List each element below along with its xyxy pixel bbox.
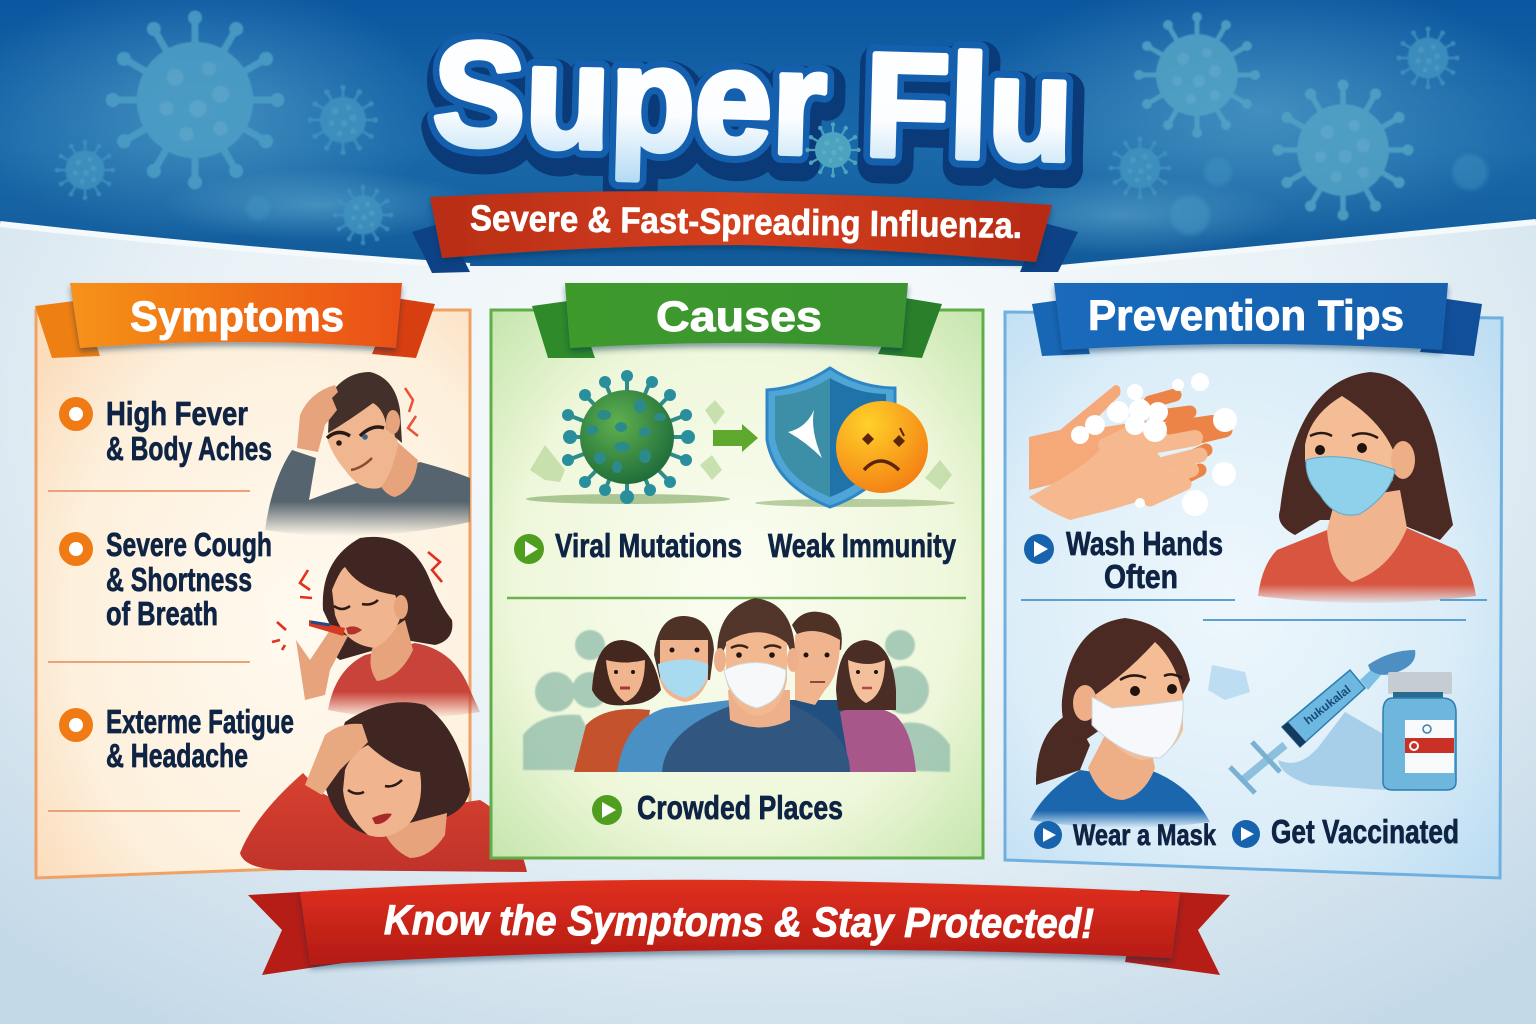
illustration: crowd [523,598,950,772]
cause label: crowded places [592,789,843,826]
subtitle ribbon: Severe & Fast-Spreading Influenza. [470,197,1022,246]
label: of Breath [106,595,218,632]
prevention banner [1032,283,1482,356]
panel: causes [491,283,983,858]
person: woman in orange [574,640,661,772]
causes banner [532,283,942,358]
label: High Fever [106,395,248,432]
panel: prevention tips [1005,283,1502,878]
illustration: woman coughing [272,537,480,718]
label: & Body Aches [106,430,272,467]
symptoms banner: Symptoms [130,293,344,341]
title: Super Flu [434,21,1078,202]
panel background [491,310,983,858]
icon: title virus [805,122,861,178]
person: man in white mask [662,598,850,772]
tip label: wash hands [1024,525,1223,595]
subtitle ribbon [412,191,1078,273]
person: man at right [790,612,872,772]
cause label: weak immunity: Weak Immunity [768,527,956,564]
tip label: get vaccinated [1232,813,1459,850]
cause label: viral mutations [514,527,742,564]
tip label: wear a mask: Wear a Mask [1073,819,1216,852]
cause label: viral mutations: Viral Mutations [555,527,742,564]
title: Super Flu [431,12,1075,192]
icon: shield with sad face [755,368,955,507]
illustration: man with fever [265,372,470,536]
bullet [59,397,93,431]
symptom: severe cough [59,526,272,632]
label: Severe Cough [106,526,272,563]
cause label: crowded places: Crowded Places [637,789,843,826]
symptom: high fever [59,395,272,467]
prevention banner: Prevention Tips [1088,292,1404,340]
icon: green virus [526,370,730,504]
tip label: wash hands: Often [1104,558,1178,595]
person: woman in purple [836,640,916,772]
title: Super Flu [431,12,1075,192]
panel background [1005,312,1502,878]
panel: symptoms [35,283,527,878]
illustration: woman with white mask [1030,618,1210,828]
label: & Shortness [106,561,252,598]
illustration: exhausted woman [240,702,527,872]
header band [0,0,1536,268]
symptom: fatigue [59,703,294,774]
causes banner: Causes [656,293,822,341]
label [106,395,272,467]
arrow [713,424,758,452]
tip label: wear a mask [1034,819,1216,852]
tip label: wash hands: Wash Hands [1066,525,1223,562]
symptoms banner [35,283,435,358]
background silhouettes [523,630,950,772]
label: & Headache [106,737,248,774]
person: man in blue mask [617,616,730,772]
background virus particles [55,11,1488,245]
illustration: syringe, glove and vaccine vial: hukukalal [1301,682,1353,727]
label [106,526,272,632]
label: Exterme Fatigue [106,703,294,740]
panel background [36,310,470,878]
illustration: woman with blue mask [1258,372,1476,603]
bullet [59,708,93,742]
bottom ribbon: Know the Symptoms & Stay Protected! [384,896,1094,947]
bullet [59,532,93,566]
bottom ribbon [248,880,1230,975]
illustration: syringe, glove and vaccine vial [1208,650,1456,793]
label [106,703,294,774]
tip label: get vaccinated: Get Vaccinated [1271,813,1459,850]
illustration: washing hands [1029,373,1237,520]
